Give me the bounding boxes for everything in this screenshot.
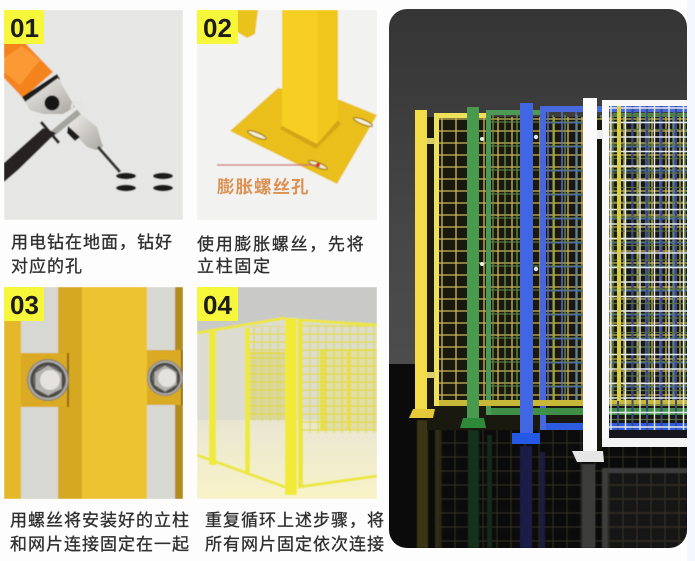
step 04 illustration — [197, 287, 377, 499]
caption 03: 和网片连接固定在一起 — [10, 535, 190, 554]
caption 01: 用电钻在地面，钻好 — [11, 233, 173, 252]
right page strip — [687, 0, 695, 561]
dark backing behind the mesh — [427, 117, 687, 430]
step 02 illustration — [197, 10, 377, 220]
badge 01 — [4, 10, 44, 44]
caption 04: 所有网片固定依次连接 — [205, 535, 385, 554]
badge 02: 02 — [203, 13, 232, 43]
green fence panel — [486, 110, 687, 415]
caption 04: 重复循环上述步骤，将 — [205, 511, 385, 530]
badge 04: 04 — [203, 290, 232, 320]
white fence panel — [572, 98, 687, 462]
panel: step 02 fixing post — [197, 10, 377, 276]
green post — [460, 107, 486, 428]
right bolt — [147, 360, 183, 396]
badge 03 — [4, 287, 44, 321]
badge 03: 03 — [10, 290, 39, 320]
badge 01: 01 — [10, 13, 39, 43]
bolt slots — [247, 116, 373, 171]
caption 02: 立柱固定 — [197, 257, 272, 276]
badge 04 — [197, 287, 238, 321]
left bolt — [27, 359, 69, 401]
yellow fence panel — [409, 110, 687, 418]
panel: step 04 finished fence — [197, 287, 385, 554]
panel: step 01 drilling — [4, 10, 183, 276]
bottom rails of the coloured panels — [439, 400, 687, 430]
caption 01: 对应的孔 — [11, 257, 83, 276]
caption 02: 使用膨胀螺丝，先将 — [197, 234, 365, 254]
blue fence panel — [540, 106, 687, 430]
floor — [389, 364, 687, 548]
badge 02 — [197, 10, 238, 44]
blue post — [512, 103, 540, 444]
step 01 illustration — [4, 10, 183, 220]
panel: step 03 bolts — [4, 287, 190, 554]
panel: coloured fence product photo — [389, 9, 687, 548]
caption 03: 用螺丝将安装好的立柱 — [10, 511, 190, 530]
drilled holes — [116, 173, 173, 191]
expansion hole label: 膨胀螺丝孔 — [217, 177, 310, 197]
fence reflections — [417, 420, 687, 548]
studio wall — [389, 9, 687, 364]
step 03 illustration — [4, 287, 183, 499]
